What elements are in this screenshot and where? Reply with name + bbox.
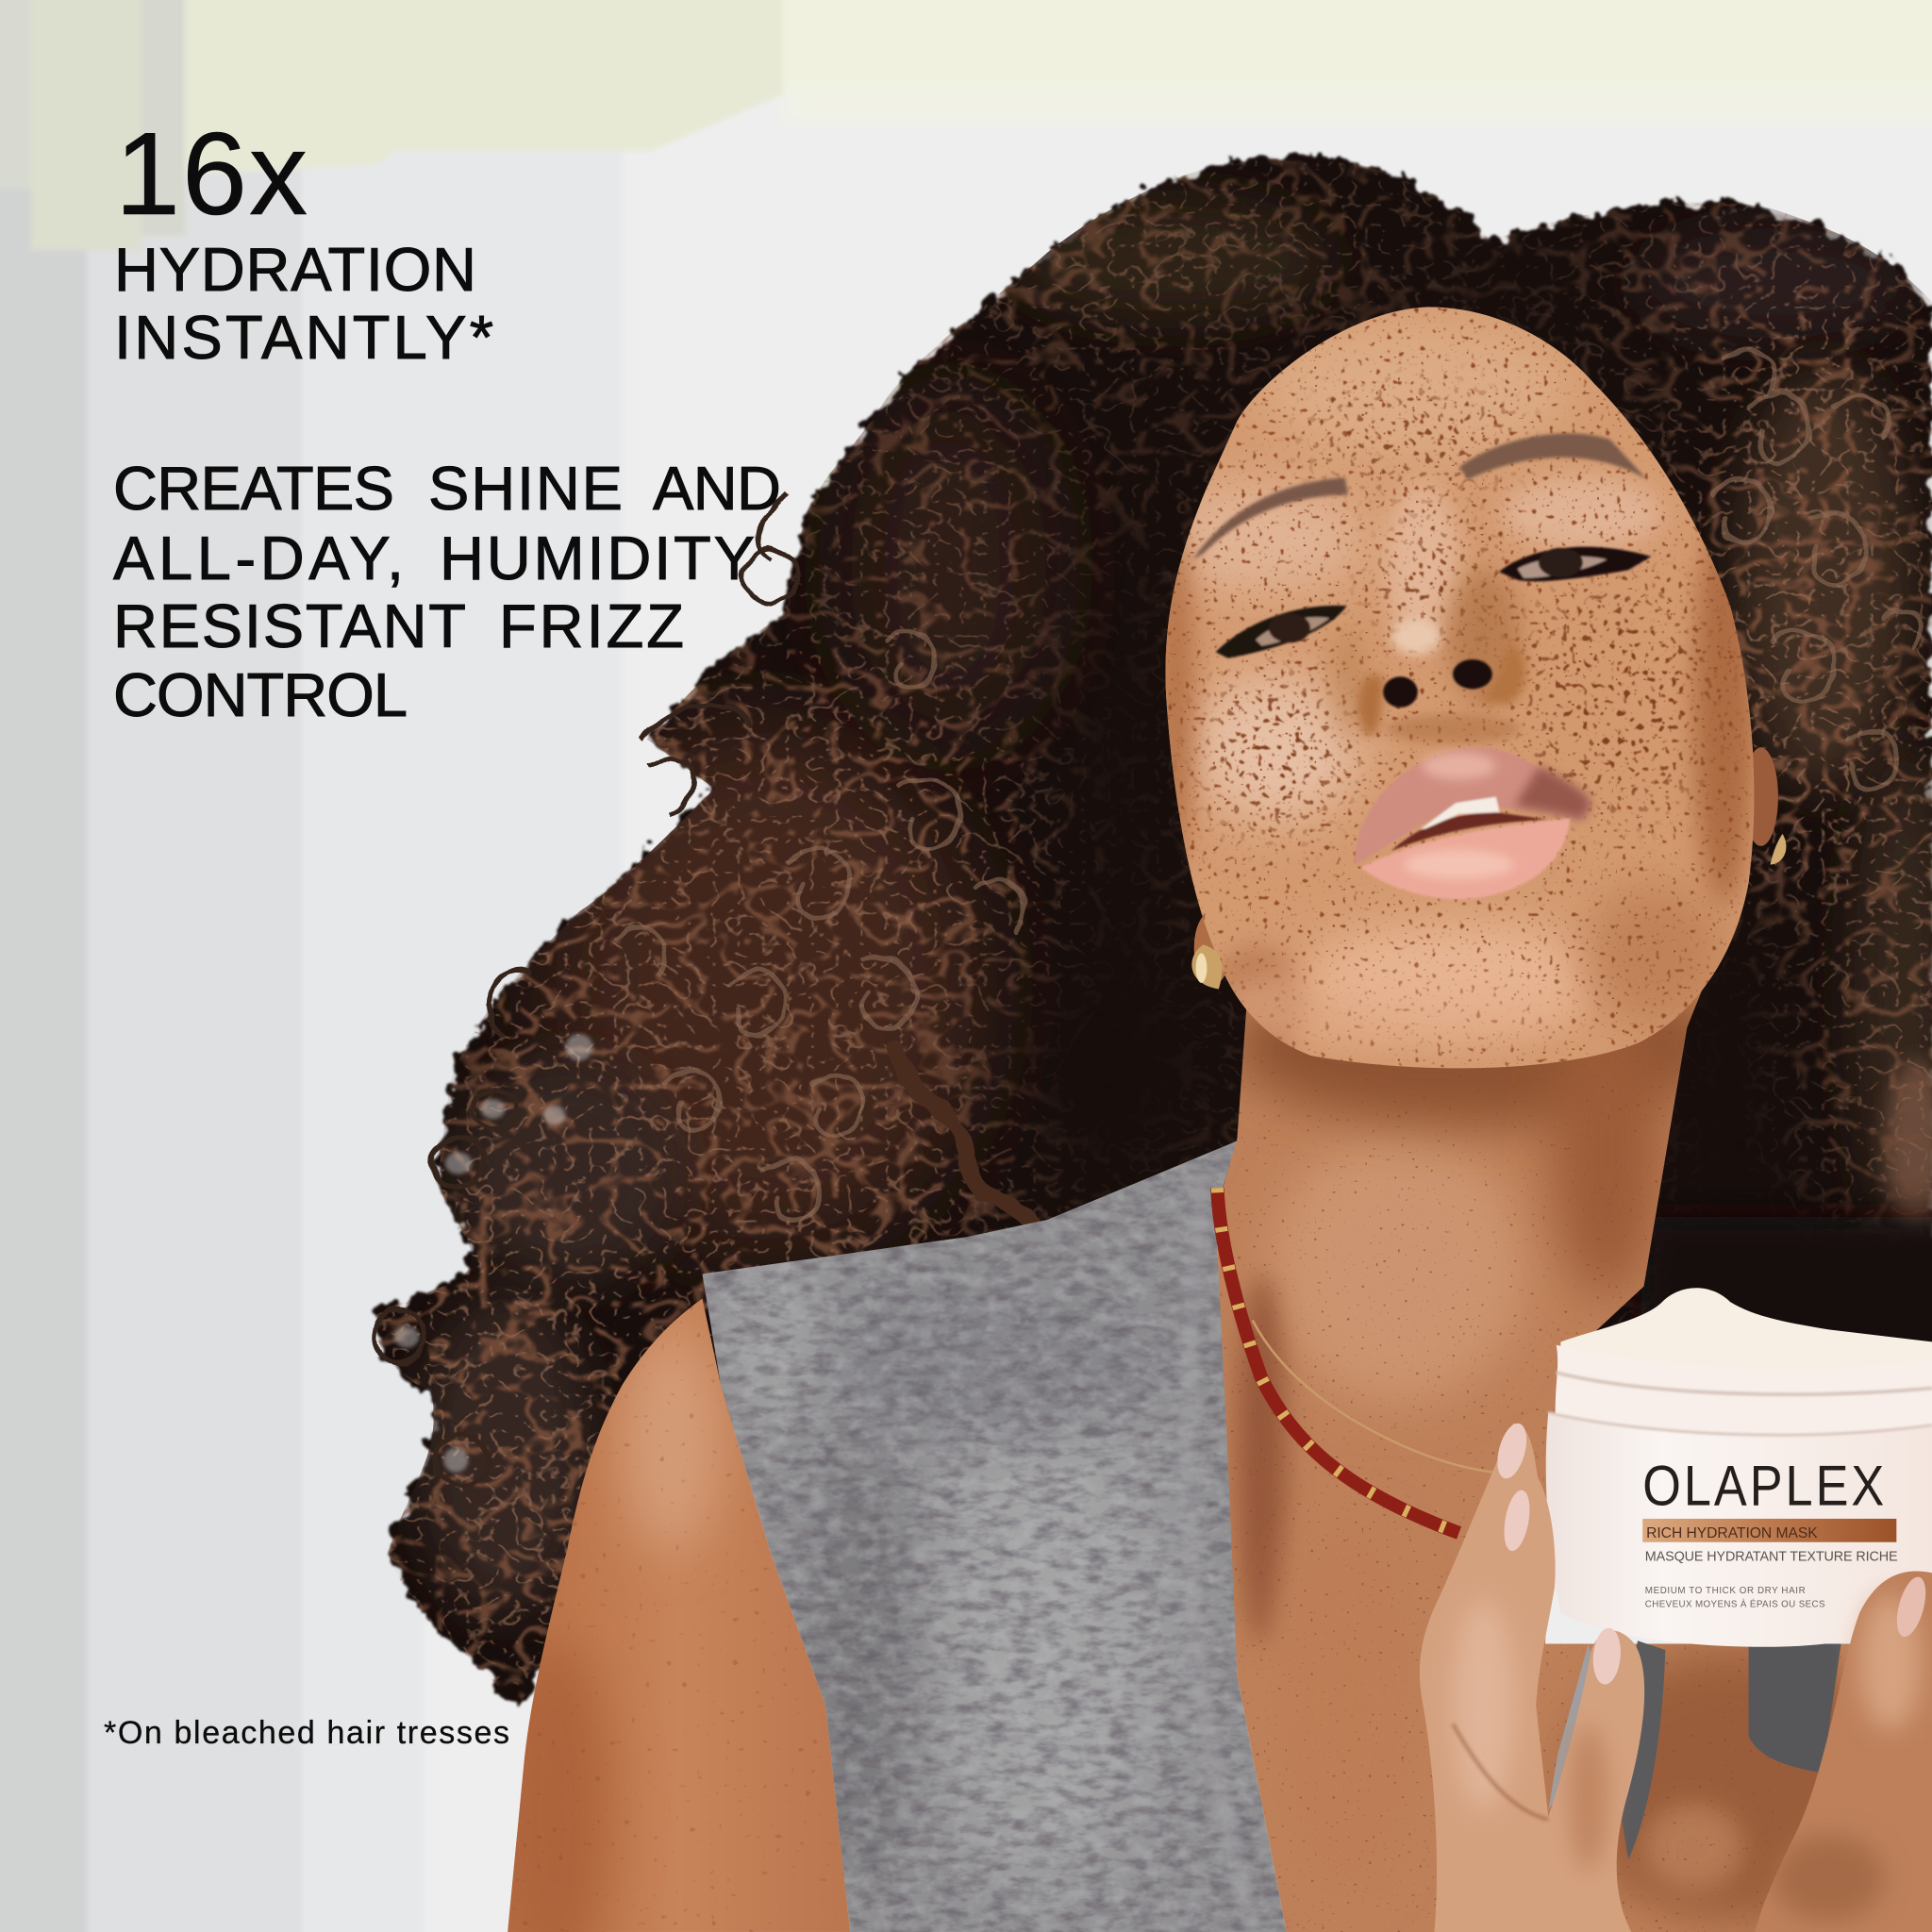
product jar: Olaplex Rich Hydration Mask <box>1546 1288 1932 1647</box>
hair: large curly mass <box>345 124 1932 1932</box>
face skin with freckles <box>1151 298 1767 1074</box>
eye: left <box>1216 606 1347 658</box>
benefit copy: AND <box>653 454 781 523</box>
copper product bar <box>1642 1519 1896 1542</box>
nose <box>1357 618 1525 737</box>
benefit copy <box>113 454 781 729</box>
ears <box>1194 747 1778 985</box>
necklace: gold chain <box>1253 1321 1496 1473</box>
face <box>1151 298 1786 1074</box>
jar rim <box>1556 1345 1932 1441</box>
cream top <box>1560 1288 1932 1385</box>
jar and hands <box>1420 1288 1932 1932</box>
benefit copy: SHINE <box>428 454 623 523</box>
hair type line two: CHEVEUX MOYENS À ÉPAIS OU SECS <box>1645 1599 1825 1609</box>
sweater glimpses behind the hand <box>1548 1641 1841 1859</box>
fingernails <box>1492 1420 1532 1482</box>
jar body <box>1546 1413 1932 1647</box>
eyebrow: right <box>1459 433 1647 479</box>
stat caption: HYDRATION <box>114 235 476 304</box>
benefit copy: FRIZZ <box>499 591 684 660</box>
benefit copy: CREATES <box>113 454 394 523</box>
hair type line one: MEDIUM TO THICK OR DRY HAIR <box>1645 1586 1806 1596</box>
brand name: OLAPLEX <box>1642 1454 1884 1517</box>
earring: right <box>1770 834 1786 865</box>
hand: right thumb <box>1755 1572 1932 1932</box>
neck and chest skin <box>1210 991 1850 1932</box>
benefit copy: CONTROL <box>113 660 408 729</box>
stat number: 16x <box>115 109 308 240</box>
background showing through the loose left curls <box>394 1034 592 1473</box>
dark hair behind the neck and jar <box>1641 1217 1932 1424</box>
stat caption: INSTANTLY* <box>114 303 493 372</box>
hair silhouette <box>375 154 1932 1707</box>
benefit copy: RESISTANT <box>113 591 466 660</box>
hair brown tones and curl texture <box>345 124 1932 1750</box>
lips <box>1355 747 1591 899</box>
sweater: grey knit vest <box>690 1134 1306 1932</box>
hand: left fingers <box>1420 1420 1644 1932</box>
stat caption <box>114 235 493 372</box>
hair: highlighted curl strokes <box>616 351 1920 1221</box>
hair: brown strand over the sweater <box>893 1047 1041 1232</box>
benefit copy: ALL-DAY, <box>113 524 404 592</box>
product name: RICH HYDRATION MASK <box>1646 1525 1818 1541</box>
necklace: red coral beads <box>1218 1188 1459 1533</box>
hair: loose curls around the edge <box>375 492 797 1487</box>
eye: right <box>1499 547 1651 581</box>
eyebrow: left <box>1192 477 1348 559</box>
earring: left <box>1191 944 1223 989</box>
French product name: MASQUE HYDRATANT TEXTURE RICHE <box>1645 1549 1898 1564</box>
footnote: *On bleached hair tresses <box>104 1715 509 1751</box>
benefit copy: HUMIDITY <box>440 524 755 592</box>
arm: bare shoulder <box>492 1281 862 1932</box>
